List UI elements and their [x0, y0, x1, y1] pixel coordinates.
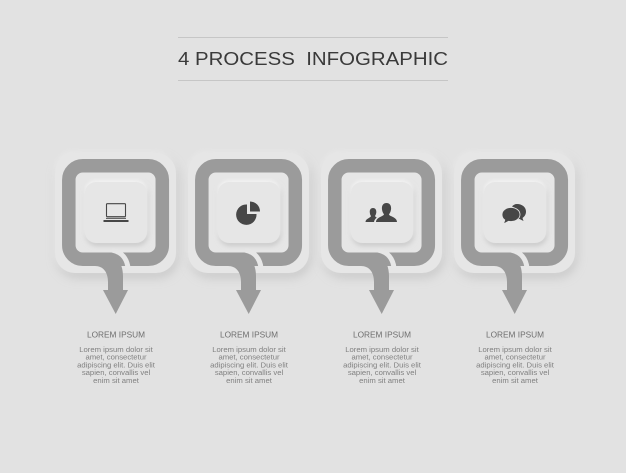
step text: adipiscing elit. Duis elit: [343, 360, 422, 370]
step text: enim sit amet: [492, 376, 539, 385]
step text: LOREM IPSUM: [87, 330, 145, 340]
step text: enim sit amet: [226, 376, 273, 385]
step text: sapien, convallis vel: [348, 368, 416, 377]
card background: [55, 153, 176, 273]
step text: sapien, convallis vel: [82, 368, 150, 377]
step text: [210, 330, 289, 385]
panel: step 1: [55, 153, 176, 385]
step text: adipiscing elit. Duis elit: [476, 360, 555, 370]
icon: laptop: [104, 204, 128, 222]
step text: Lorem ipsum dolor sit: [345, 345, 420, 354]
ring and arrow: [335, 166, 428, 314]
icon tile: [484, 182, 546, 243]
icon: people: [366, 203, 397, 222]
step text: Lorem ipsum dolor sit: [79, 345, 154, 354]
panel: step 3: [321, 153, 442, 385]
step text: sapien, convallis vel: [481, 368, 549, 377]
step text: Lorem ipsum dolor sit: [478, 345, 553, 354]
step text: enim sit amet: [93, 376, 140, 385]
step text: LOREM IPSUM: [486, 330, 544, 340]
step text: LOREM IPSUM: [353, 330, 411, 340]
icon tile: [218, 182, 280, 243]
step text: [343, 330, 422, 385]
card background: [321, 153, 442, 273]
step text: [476, 330, 555, 385]
panel: step 4: [454, 153, 575, 385]
step text: enim sit amet: [359, 376, 406, 385]
icon: pie chart: [236, 202, 260, 225]
step text: [77, 330, 156, 385]
icon tile: [85, 182, 147, 243]
ring and arrow: [69, 166, 162, 314]
step text: amet, consectetur: [218, 353, 280, 362]
step text: amet, consectetur: [351, 353, 413, 362]
icon tile: [351, 182, 413, 243]
step text: sapien, convallis vel: [215, 368, 283, 377]
ring and arrow: [202, 166, 295, 314]
step text: adipiscing elit. Duis elit: [210, 360, 289, 370]
card background: [188, 153, 309, 273]
title: 4 PROCESS INFOGRAPHIC: [178, 48, 448, 69]
step text: adipiscing elit. Duis elit: [77, 360, 156, 370]
icon: speech bubbles: [502, 204, 526, 224]
card background: [454, 153, 575, 273]
step text: amet, consectetur: [484, 353, 546, 362]
panel: step 2: [188, 153, 309, 385]
ring and arrow: [468, 166, 561, 314]
step text: LOREM IPSUM: [220, 330, 278, 340]
step text: amet, consectetur: [85, 353, 147, 362]
step text: Lorem ipsum dolor sit: [212, 345, 287, 354]
